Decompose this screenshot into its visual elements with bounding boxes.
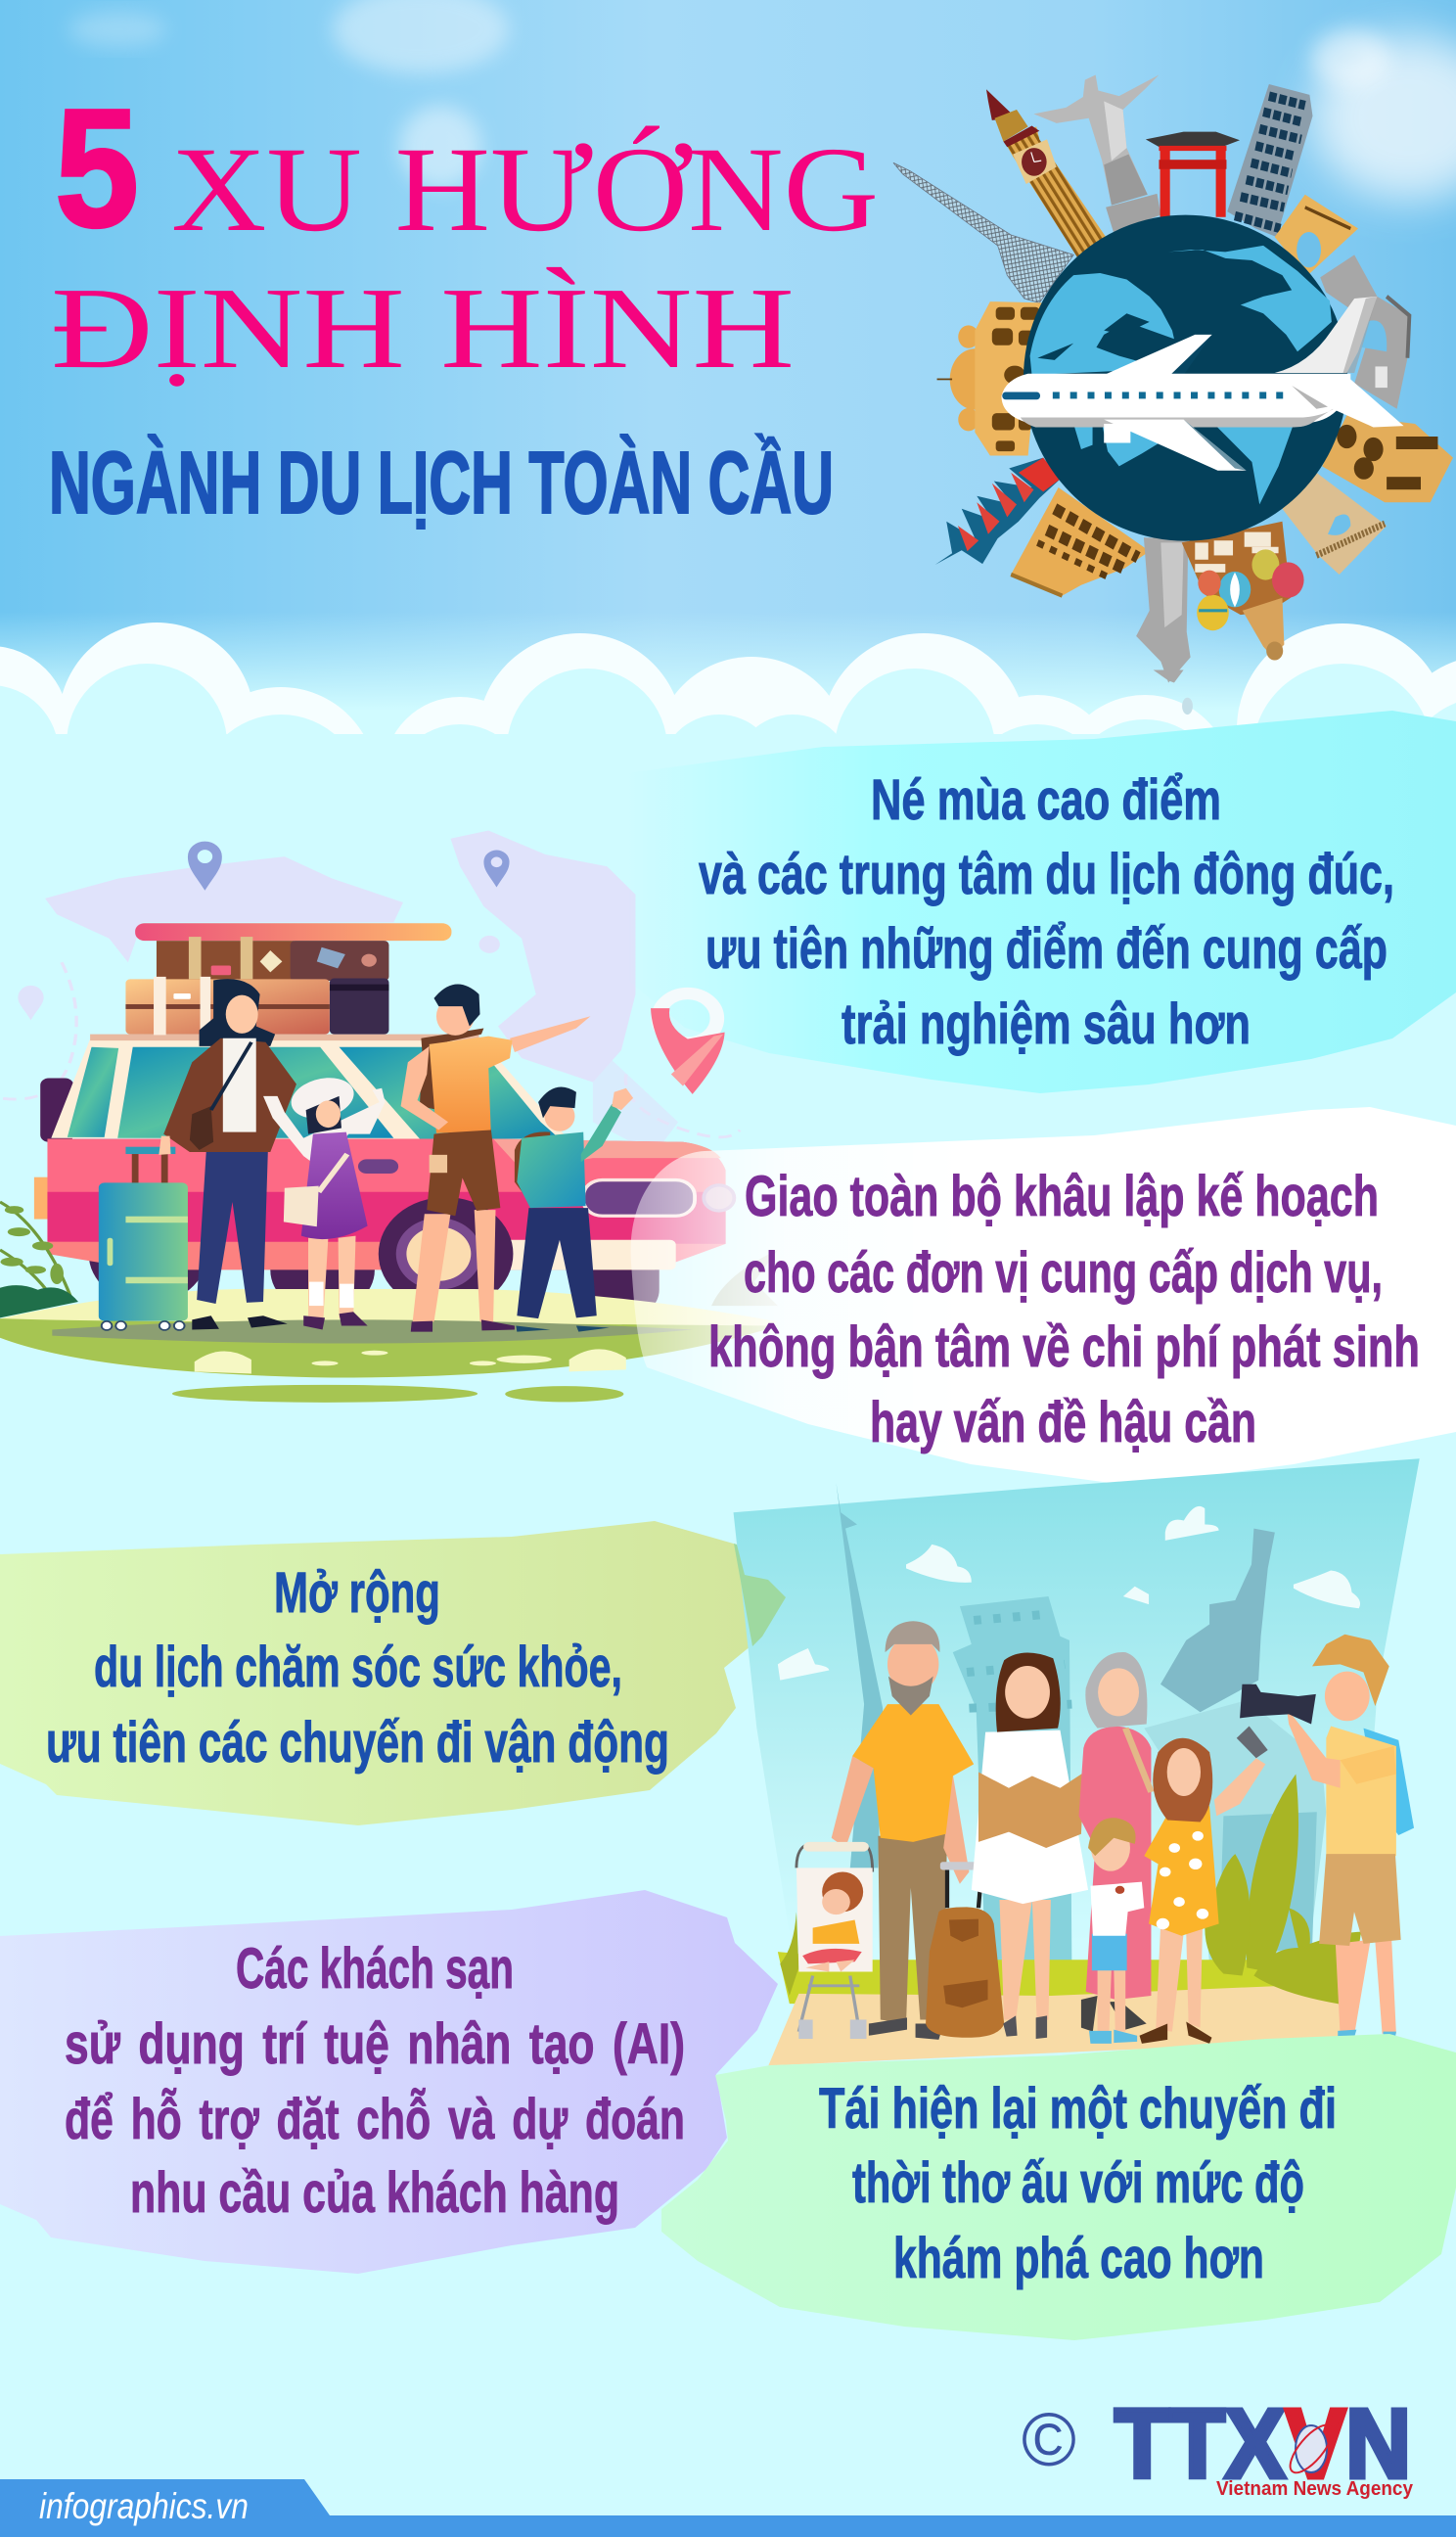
text block: trend 2: hay vấn đề hậu cần	[870, 1391, 1256, 1454]
landmark: St Basil with balloons	[1182, 522, 1304, 661]
text block: trend 3: ưu tiên các chuyến đi vận động	[46, 1711, 669, 1775]
person: grandfather	[832, 1621, 974, 2040]
title	[49, 74, 879, 532]
illustration: globe with world landmarks and airplane	[893, 74, 1453, 715]
copyright symbol: ©	[1022, 2398, 1076, 2482]
location pin: red	[651, 993, 725, 1094]
panel: fourth trend background	[0, 1890, 778, 2274]
person: boy waving	[515, 1087, 633, 1332]
landmark silhouettes	[836, 1483, 1326, 1963]
text block: trend 2	[708, 1165, 1420, 1454]
text block: trend 1: trải nghiệm sâu hơn	[842, 992, 1251, 1056]
person: man pointing	[401, 985, 590, 1332]
panel: fifth trend background	[661, 2034, 1456, 2340]
title: NGÀNH DU LỊCH TOÀN CẦU: NGÀNH DU LỊCH TOÀN CẦU	[49, 433, 834, 532]
landmark: Eiffel tower	[893, 162, 1073, 302]
landmark: triumphal arch lower right	[1282, 473, 1387, 575]
text block: trend 4: nhu cầu của khách hàng	[130, 2161, 619, 2225]
landmark: India Gate	[1275, 195, 1358, 276]
person: photographer	[1240, 1635, 1414, 2039]
globe	[1024, 215, 1347, 541]
logo: TTXVN Vietnam News Agency: TTXVN	[1115, 2389, 1411, 2499]
background: sky	[0, 0, 1456, 711]
location pin: blue small	[483, 851, 510, 887]
airplane	[1001, 297, 1404, 471]
logo: TTXVN Vietnam News Agency: Vietnam News Agency	[1216, 2478, 1414, 2500]
landmark: Colosseum	[1011, 487, 1150, 596]
picture background	[734, 1458, 1420, 2065]
location pin: blue large	[188, 842, 222, 891]
landmark: pagoda	[935, 458, 1061, 565]
illustration: multi-generation family in front of landmarks	[734, 1458, 1420, 2065]
text block: trend 1	[699, 768, 1394, 1056]
stroller with baby	[796, 1842, 873, 2039]
small white clouds	[778, 1506, 1360, 1681]
person: mother with map	[972, 1653, 1088, 2039]
landmark: Big Ben	[986, 89, 1106, 257]
landmark: leaning tower of Pisa	[1227, 84, 1312, 237]
landmark: grey arches	[1320, 254, 1409, 409]
text block: trend 4	[65, 1937, 685, 2225]
landmark: Statue of Liberty	[1136, 537, 1193, 715]
faded plant behind white panel	[711, 1250, 778, 1306]
landmark: Taj Mahal	[937, 301, 1042, 456]
dashed travel route	[0, 962, 740, 1137]
ground	[0, 1289, 778, 1403]
green blob overlapping the family picture	[734, 1544, 786, 1646]
person: girl with phone	[1140, 1727, 1268, 2044]
text block: trend 1: Né mùa cao điểm	[871, 768, 1221, 832]
panel: third trend background	[0, 1521, 786, 1825]
luggage	[99, 1147, 188, 1330]
panel: second trend background	[631, 1107, 1456, 1486]
title: number 5: 5	[55, 74, 139, 262]
text block: trend 4: để hỗ trợ đặt chỗ và dự đoán	[65, 2088, 685, 2151]
person: grandmother	[1079, 1652, 1151, 2032]
landmark: Christ the Redeemer	[1033, 74, 1160, 232]
text block: trend 5: khám phá cao hơn	[893, 2227, 1264, 2290]
landmark: gothic cathedral right	[1322, 415, 1453, 502]
panel: first trend background	[626, 711, 1456, 1093]
plant left	[0, 1202, 78, 1317]
location pin: faint	[18, 986, 44, 1020]
text block: trend 3: du lịch chăm sóc sức khỏe,	[94, 1636, 622, 1699]
grass and ground	[778, 1948, 1359, 2007]
person: girl	[263, 1071, 386, 1330]
illustration: family with car	[0, 831, 778, 1403]
world map background	[45, 831, 678, 1154]
roof rack and suitcases	[125, 923, 451, 1035]
title: XU HƯỚNG: XU HƯỚNG	[171, 122, 879, 256]
landmark: red torii gate	[1146, 132, 1240, 217]
car	[34, 1035, 734, 1317]
footer text: infographics.vn: infographics.vn	[39, 2486, 249, 2526]
clouds band	[0, 623, 1456, 900]
plants	[780, 1775, 1361, 2006]
text block: trend 3: Mở rộng	[274, 1561, 440, 1625]
text block: trend 4: Các khách sạn	[236, 1937, 514, 2001]
footer bar	[0, 2479, 1456, 2537]
text block: trend 3	[46, 1561, 669, 1775]
title: ĐỊNH HÌNH: ĐỊNH HÌNH	[51, 263, 795, 392]
text block: trend 4: sử dụng trí tuệ nhân tạo (AI)	[65, 2012, 685, 2076]
suitcase	[926, 1862, 1004, 2038]
person: woman	[159, 979, 296, 1330]
text block: trend 5	[819, 2077, 1337, 2290]
person: boy with ice cream	[1088, 1818, 1144, 2044]
